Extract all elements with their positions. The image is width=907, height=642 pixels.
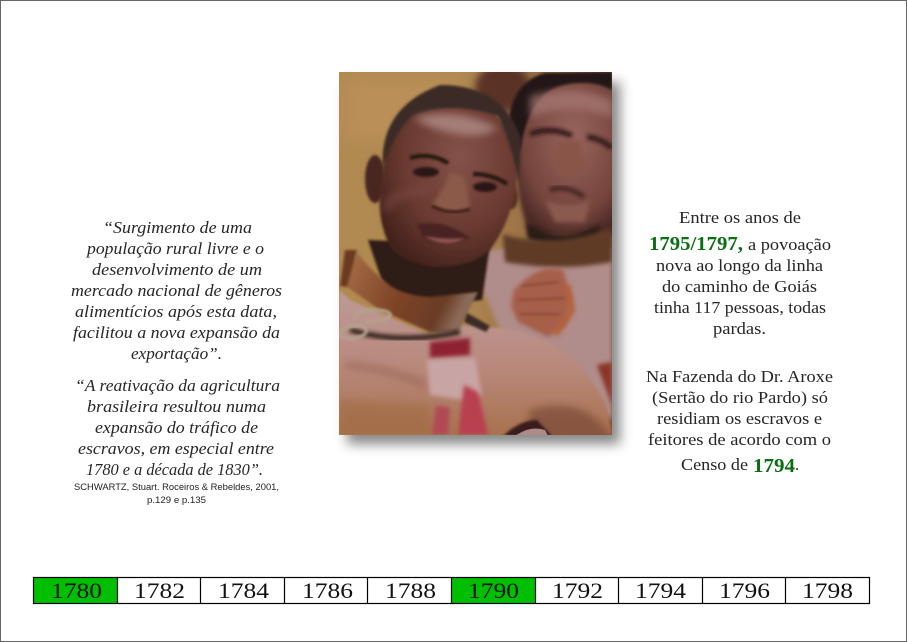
blood — [430, 338, 470, 358]
note census 1794: 1794 — [753, 455, 795, 477]
note 1795/1797 — [649, 208, 831, 338]
main man's ear — [365, 155, 385, 203]
chest and shoulder — [339, 290, 612, 435]
hair — [383, 85, 521, 182]
timeline 1780-1798 — [33, 577, 870, 604]
source citation: p.129 e p.135 — [147, 495, 206, 506]
note 1795/1797: Entre os anos de — [679, 208, 801, 227]
timeline 1780-1798: 1796 — [719, 578, 770, 603]
nose — [432, 172, 470, 212]
note census 1794: Na Fazenda do Dr. Aroxe — [646, 367, 833, 386]
quote 1: alimentícios após esta data, — [75, 302, 277, 321]
highlighted years — [33, 578, 118, 604]
quote 2 — [75, 376, 280, 479]
chain — [339, 310, 390, 338]
note census 1794: (Sertão do rio Pardo) só — [652, 388, 828, 407]
text block: population notes — [646, 208, 833, 477]
note census 1794: Censo de — [681, 455, 748, 474]
note census 1794: . — [795, 455, 799, 474]
mouth — [417, 223, 470, 244]
quote 2: brasileira resultou numa — [87, 397, 266, 416]
second man's collar — [503, 228, 612, 267]
photo: enslaved man with iron collar — [339, 64, 620, 444]
quote 1: população rural livre e o — [86, 239, 264, 258]
quote 1: desenvolvimento de um — [92, 260, 262, 279]
timeline 1780-1798: 1782 — [134, 578, 185, 603]
note 1795/1797: nova ao longo da linha — [656, 256, 824, 275]
timeline 1780-1798: 1786 — [302, 578, 353, 603]
quote 2: 1780 e a década de 1830”. — [86, 460, 263, 479]
note census 1794: residiam os escravos e — [657, 409, 822, 428]
brows and eyes — [410, 156, 507, 184]
source citation — [74, 482, 279, 506]
quote 1: exportação”. — [131, 344, 222, 363]
quote 1: facilitou a nova expansão da — [73, 323, 280, 342]
quote 2: expansão do tráfico de — [95, 418, 258, 437]
timeline 1780-1798: 1788 — [385, 578, 436, 603]
quote 1 — [71, 218, 282, 363]
note 1795/1797: tinha 117 pessoas, todas — [654, 298, 826, 317]
note 1795/1797: pardas. — [713, 319, 766, 338]
note 1795/1797: a povoação — [748, 235, 831, 254]
timeline 1780-1798: 1780 — [51, 578, 102, 603]
background figure — [475, 64, 531, 112]
timeline 1780-1798: 1792 — [552, 578, 603, 603]
second man's body — [468, 248, 612, 420]
quote 1: “Surgimento de uma — [103, 218, 252, 237]
main man's face — [380, 90, 518, 267]
timeline 1780-1798: 1794 — [635, 578, 686, 603]
quote 1: mercado nacional de gêneros — [71, 281, 282, 300]
neck — [368, 240, 490, 305]
note 1795/1797: 1795/1797, — [649, 233, 743, 255]
timeline 1780-1798: 1790 — [468, 578, 519, 603]
timeline 1780-1798: 1784 — [218, 578, 269, 603]
source citation: SCHWARTZ, Stuart. Roceiros & Rebeldes, 2001, — [74, 482, 279, 493]
text block: Schwartz quotes — [71, 218, 282, 506]
quote 2: “A reativação da agricultura — [75, 376, 280, 395]
quote 2: escravos, em especial entre — [78, 439, 274, 458]
note census 1794 — [646, 367, 833, 477]
note census 1794: feitores de acordo com o — [648, 430, 831, 449]
second man's head — [516, 83, 612, 236]
second man's hand — [511, 268, 572, 337]
timeline 1780-1798: 1798 — [802, 578, 853, 603]
collar — [347, 253, 478, 332]
note 1795/1797: do caminho de Goiás — [662, 277, 817, 296]
